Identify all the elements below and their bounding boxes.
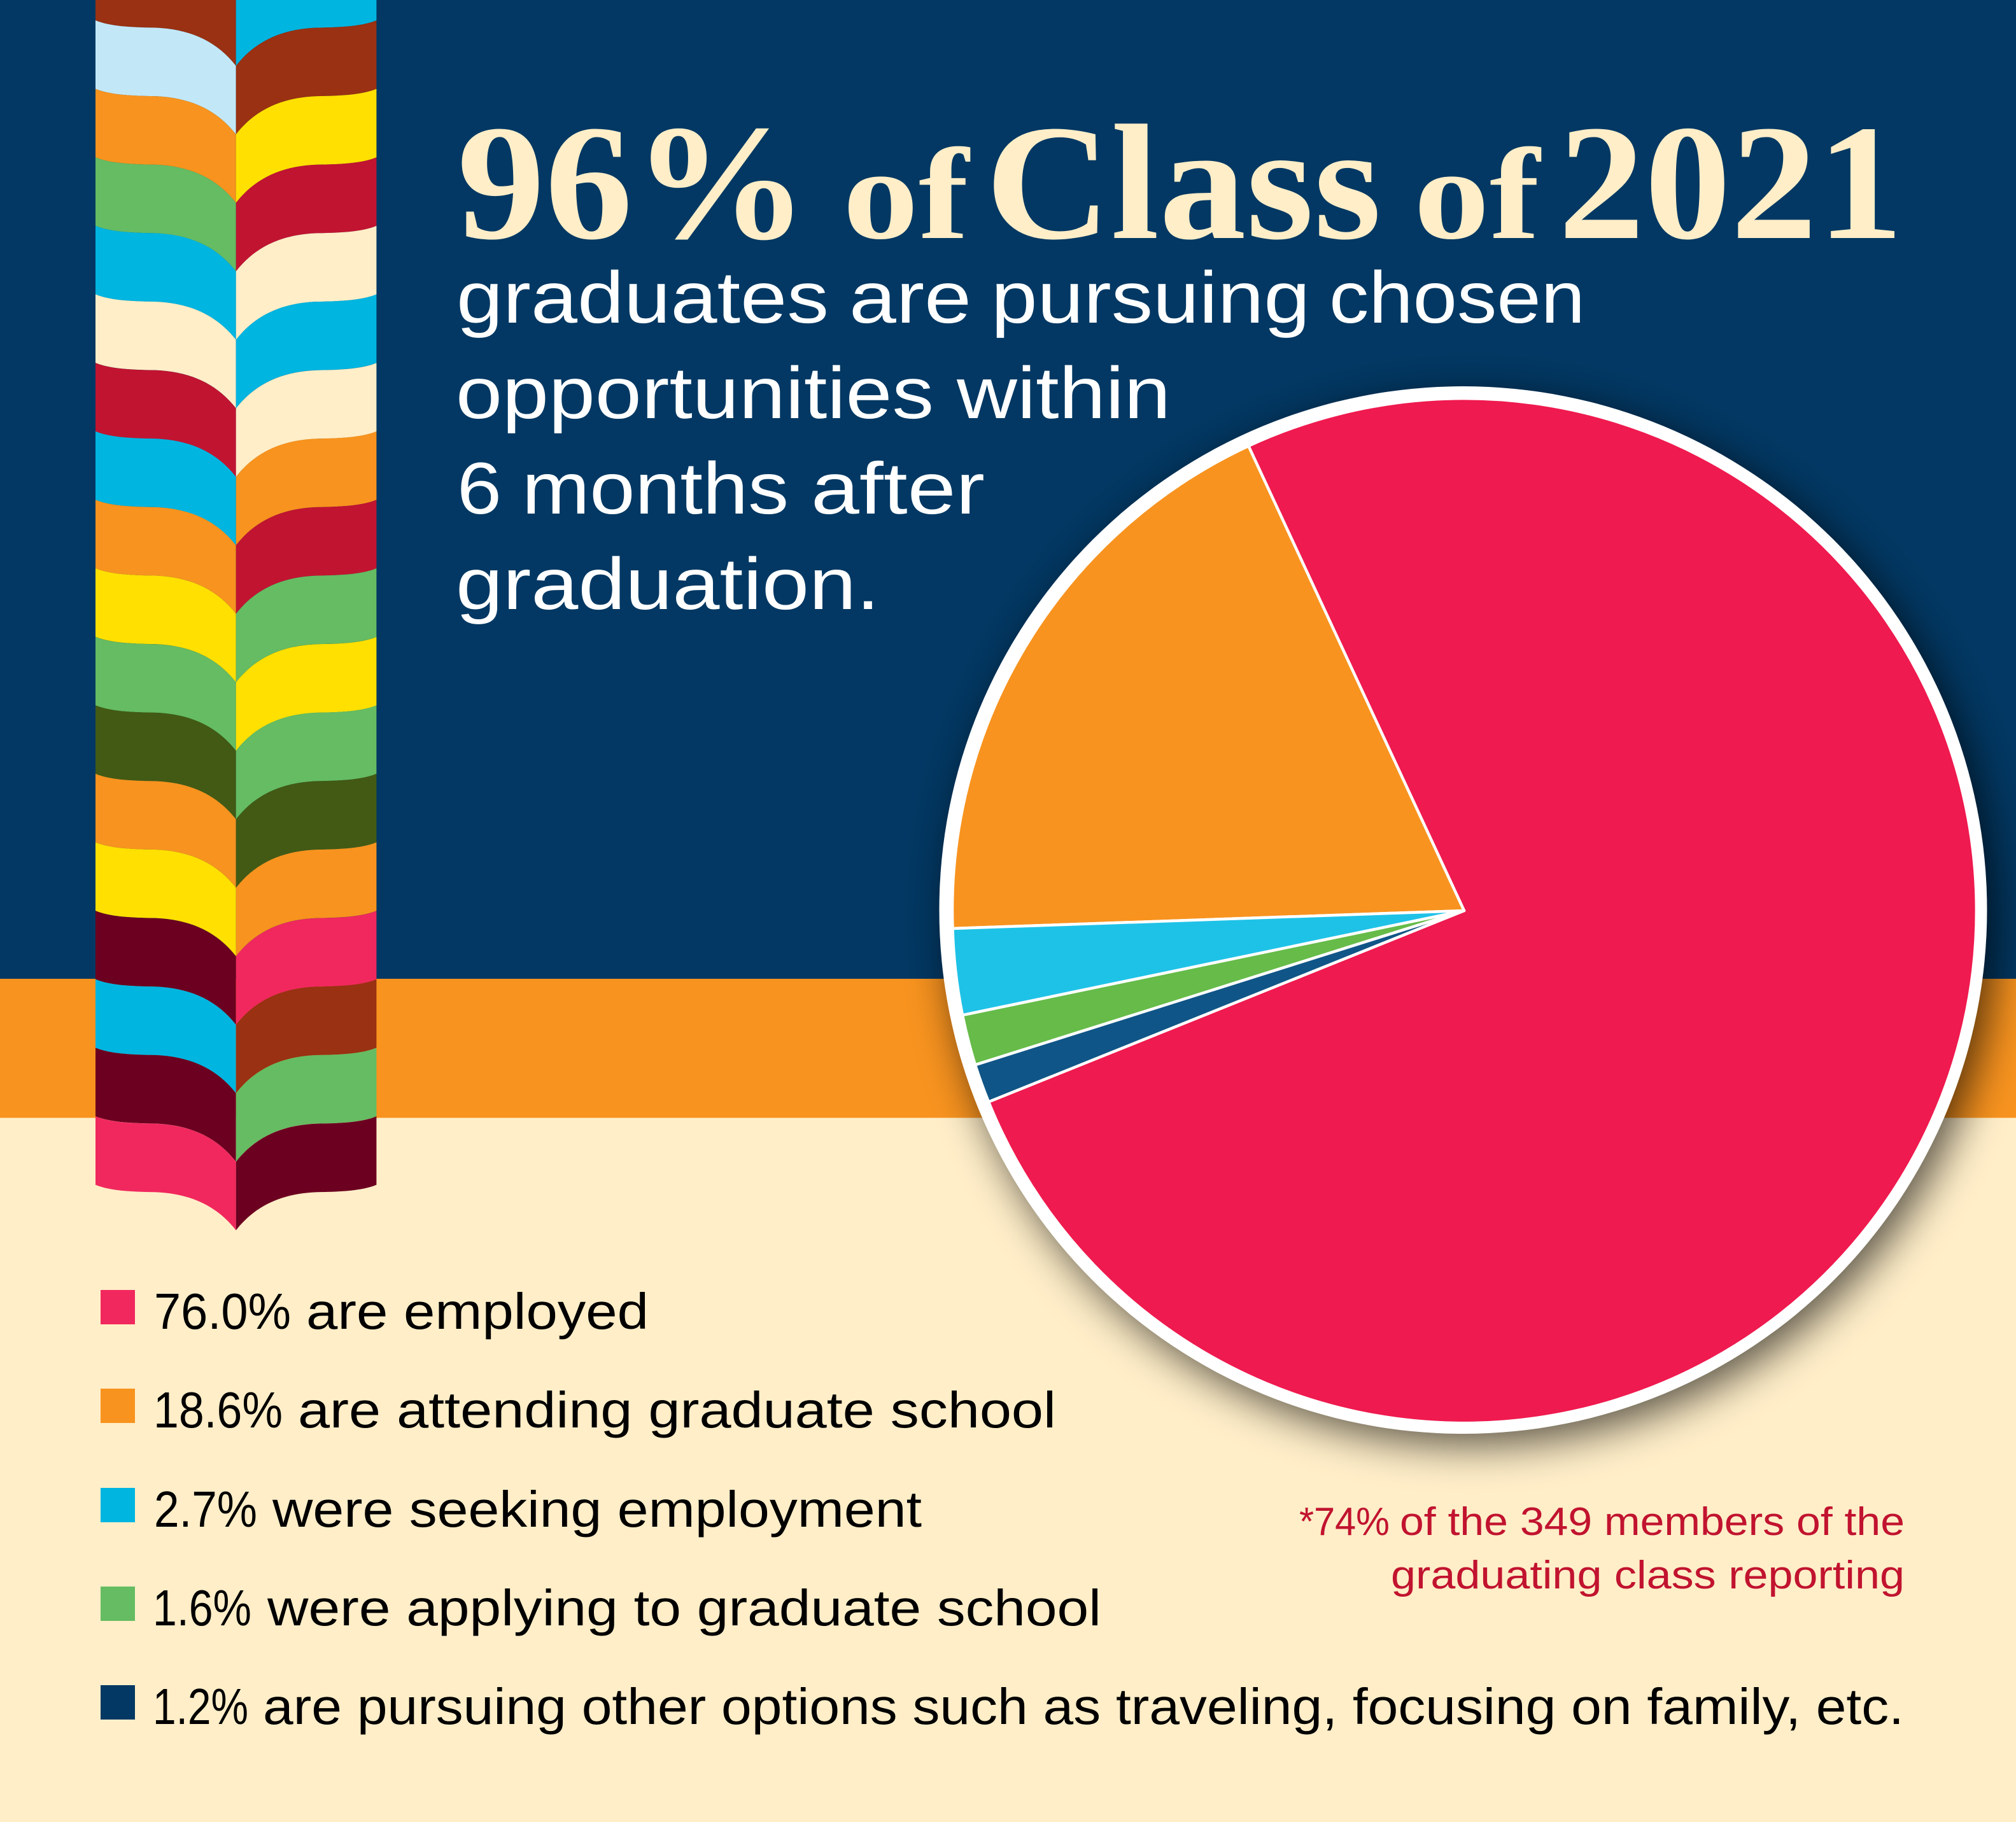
subheading bbox=[456, 257, 1585, 625]
subheading: pursuing bbox=[991, 257, 1310, 339]
pie slice: graduate school 18.6% bbox=[952, 446, 1464, 929]
subheading: are bbox=[849, 257, 971, 339]
pie slice: employed 76.0% bbox=[989, 398, 1977, 1423]
subheading: graduation. bbox=[456, 543, 880, 625]
subheading: graduates bbox=[456, 257, 829, 339]
ribbon: left column bands bbox=[95, 0, 236, 1230]
pie chart bbox=[940, 386, 1996, 1445]
legend item: applying to graduate school: 1.6% bbox=[153, 1580, 251, 1636]
legend item: seeking employment: 2.7% bbox=[154, 1481, 257, 1538]
background: orange band bbox=[0, 979, 2016, 1118]
footnote: graduating class reporting bbox=[1391, 1553, 1905, 1597]
legend item: other options: 1.2% bbox=[153, 1678, 248, 1735]
legend item: seeking employment: were seeking employment bbox=[272, 1481, 922, 1538]
subheading: 6 bbox=[457, 448, 502, 529]
title: 96% bbox=[457, 92, 808, 274]
subheading: after bbox=[811, 448, 985, 529]
subheading: chosen bbox=[1329, 257, 1585, 339]
subheading: months bbox=[522, 448, 789, 529]
footnote: of the 349 members of the bbox=[1400, 1500, 1905, 1544]
legend bbox=[101, 1283, 1904, 1735]
pie slice: other options 1.2% bbox=[975, 911, 1464, 1102]
legend item: employed: 76.0% bbox=[154, 1283, 291, 1340]
legend item: attending graduate school: 18.6% bbox=[153, 1382, 283, 1438]
footnote bbox=[1299, 1500, 1905, 1597]
title: of bbox=[1414, 122, 1542, 267]
subheading: opportunities bbox=[456, 353, 934, 434]
pie chart: drop shadow bbox=[948, 397, 1996, 1445]
ribbon: multicolour chevron column bbox=[95, 0, 376, 1230]
pie slice: applying to graduate school 1.6% bbox=[962, 911, 1464, 1065]
subheading: within bbox=[956, 353, 1171, 434]
pie slice: seeking employment 2.7% bbox=[952, 911, 1464, 1015]
pie chart: white ring bbox=[940, 386, 1987, 1434]
legend item: attending graduate school: are attending graduate school bbox=[298, 1382, 1056, 1438]
legend item: employed bbox=[101, 1283, 649, 1340]
title: Class bbox=[985, 92, 1381, 274]
title: 2021 bbox=[1558, 92, 1903, 274]
footnote: *74% bbox=[1299, 1500, 1390, 1544]
background: navy panel bbox=[0, 0, 2016, 979]
title: of bbox=[843, 122, 971, 267]
title bbox=[457, 92, 1903, 274]
ribbon: right column bands bbox=[236, 0, 376, 1230]
legend item: employed: are employed bbox=[306, 1283, 649, 1340]
legend item: applying to graduate school: were applying to graduate school bbox=[267, 1580, 1101, 1636]
legend item: other options: are pursuing other options such as traveling, focusing on family, etc. bbox=[263, 1678, 1904, 1735]
